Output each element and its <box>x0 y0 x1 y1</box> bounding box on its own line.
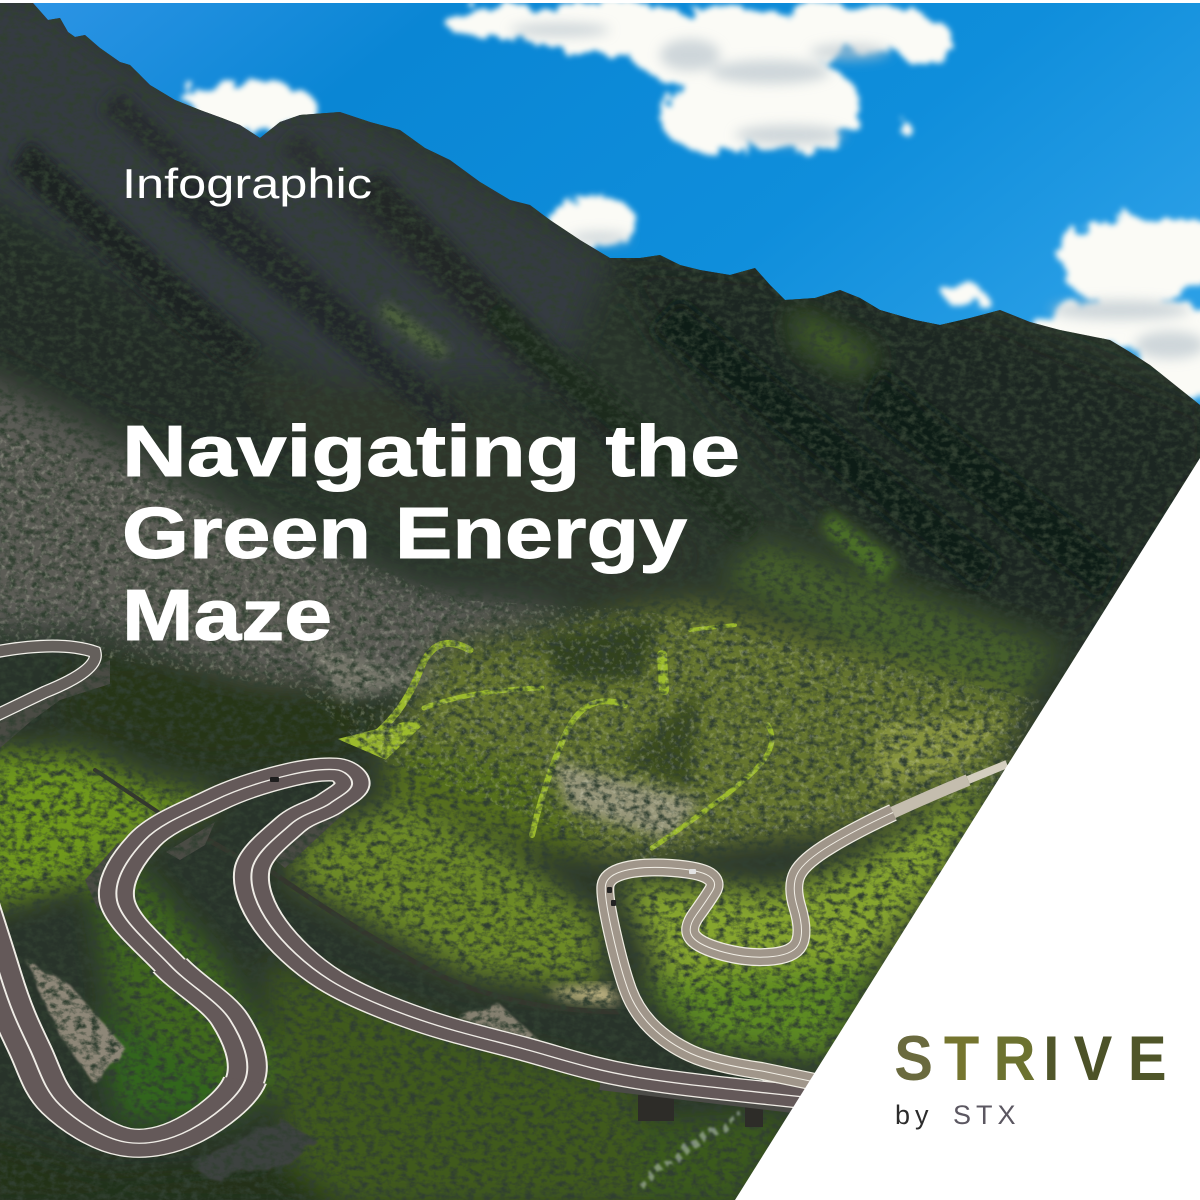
rocky scree and shadow streaks <box>10 90 1120 840</box>
dirt patch <box>545 985 620 1005</box>
mid road surface <box>170 965 247 1130</box>
cloud shading <box>510 23 1200 359</box>
rock pile <box>192 1118 316 1180</box>
title: Green Energy <box>122 494 687 574</box>
gravel lay-by <box>26 960 125 1085</box>
rock speckle texture <box>0 430 1040 860</box>
near road surface <box>0 852 245 1143</box>
cars on the road <box>270 777 696 906</box>
bridge piers <box>638 1095 763 1127</box>
logo: STRIVE by STX <box>894 1023 1167 1130</box>
main winding road <box>0 769 830 1143</box>
logo wordmark: STRIVE <box>894 1023 1167 1094</box>
far upper-left road <box>0 646 95 716</box>
label: Infographic: Infographic <box>122 160 372 207</box>
bridge deck <box>600 1085 810 1110</box>
road-side gravel patch <box>459 1002 541 1040</box>
retaining walls <box>95 770 618 1012</box>
logo tagline: by <box>895 1100 934 1130</box>
road edge lines <box>98 757 794 1108</box>
green footpaths <box>350 625 772 848</box>
road centre line <box>0 769 830 1143</box>
logo tagline: STX <box>953 1100 1021 1130</box>
sky <box>0 3 1200 483</box>
valley switchback road <box>605 764 1007 1082</box>
title: Maze <box>122 576 332 656</box>
top white edge <box>0 0 1200 3</box>
mid road edge lines <box>170 965 247 1130</box>
clouds <box>180 2 1200 402</box>
stream <box>640 1115 742 1185</box>
stone walls beside roads <box>0 660 345 910</box>
white diagonal corner panel <box>735 458 1200 1200</box>
title: Navigating the <box>122 412 740 492</box>
title <box>122 412 740 656</box>
road surface <box>100 758 804 1107</box>
near road edge lines <box>0 852 245 1143</box>
